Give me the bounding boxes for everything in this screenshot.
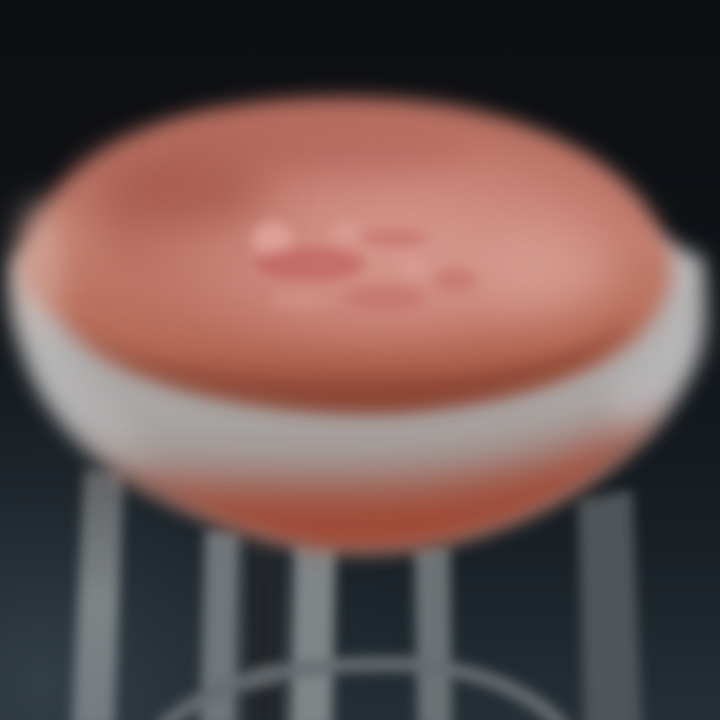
stool legs <box>72 470 642 720</box>
centre speckle pattern <box>252 222 477 311</box>
leg: inner right <box>414 545 452 720</box>
seat dish <box>103 124 627 340</box>
seat left rim pale sheen <box>16 200 60 330</box>
leg: centre <box>290 540 336 720</box>
leg: far left <box>72 470 124 720</box>
leg: dark shadow strut <box>248 540 280 720</box>
seat <box>0 82 720 568</box>
seat lower rim shadow <box>70 320 635 411</box>
band highlight right <box>610 285 704 435</box>
seat top rim <box>22 97 672 408</box>
dish shadow top <box>170 130 470 170</box>
dish highlight right <box>475 228 615 312</box>
band highlight left <box>14 290 150 462</box>
leg: far right <box>578 490 642 720</box>
leg: inner left <box>200 530 240 720</box>
seat body band <box>12 208 705 550</box>
red underside, masked to the seat silhouette <box>108 398 666 564</box>
footrest ring <box>160 664 566 720</box>
dish shadow upper left <box>90 154 270 226</box>
